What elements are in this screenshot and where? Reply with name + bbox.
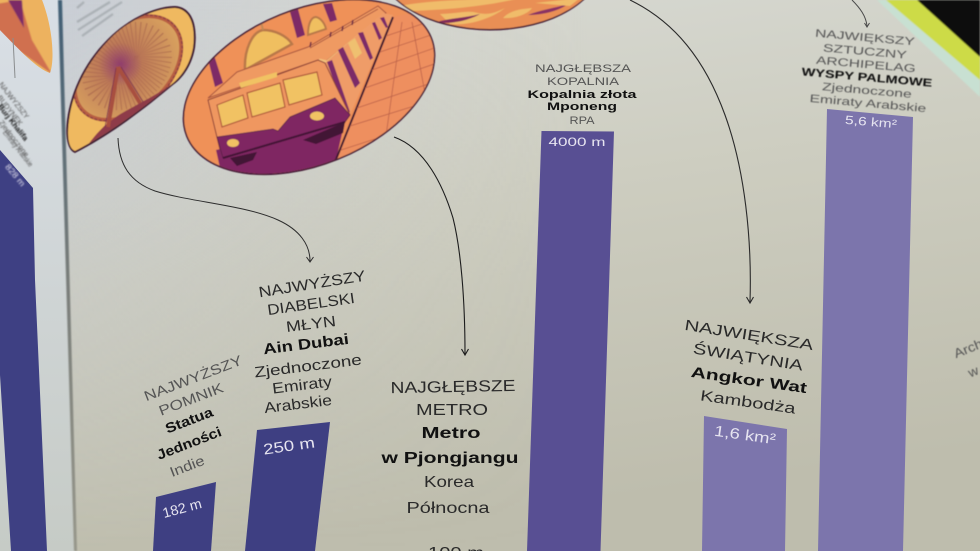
ferris ground xyxy=(89,86,170,144)
label: largest artificial archipelago: Zjednoczone xyxy=(822,81,912,101)
page corner: next pages and dark background xyxy=(877,0,980,97)
label: largest temple xyxy=(683,317,814,418)
label: deepest metro: METRO xyxy=(416,402,488,419)
train windows xyxy=(217,72,322,127)
label: largest temple: NAJWIĘKSZA xyxy=(683,317,814,354)
label: tallest statue: Jedności xyxy=(154,423,224,463)
book gutter xyxy=(58,0,77,551)
train underside and wheels xyxy=(223,122,345,158)
arrow: archipelago to label xyxy=(852,0,870,27)
label: largest temple: Angkor Wat xyxy=(690,364,808,397)
label: deepest metro: Metro xyxy=(422,425,481,442)
label: deepest mine xyxy=(528,63,638,127)
label: tallest statue: POMNIK xyxy=(156,379,226,419)
cropped label at right edge xyxy=(951,336,980,381)
wheel rim xyxy=(74,14,184,122)
label: tallest statue: NAJWYŻSZY xyxy=(141,351,245,404)
label: largest temple: Kambodża xyxy=(699,387,798,418)
bar: temple 1,6 km2: 1,6 km² xyxy=(713,423,777,448)
station arches xyxy=(245,30,292,70)
label: tallest ferris wheel xyxy=(253,267,367,417)
bar: statue 182 m: 182 m xyxy=(161,495,203,521)
bar: ferris wheel 250 m xyxy=(245,422,330,551)
label: tallest ferris wheel: MŁYN xyxy=(285,313,337,336)
label: largest artificial archipelago: ARCHIPELAG xyxy=(816,55,916,75)
label: tallest ferris wheel: Zjednoczone xyxy=(253,351,363,382)
ground under train xyxy=(216,124,342,174)
label: tallest ferris wheel: Ain Dubai xyxy=(262,331,350,358)
roof pantograph marks xyxy=(310,20,353,47)
label: tallest statue: Indie xyxy=(167,452,207,480)
label: deepest mine: KOPALNIA xyxy=(547,76,620,88)
train side xyxy=(325,13,393,115)
ferris legs xyxy=(108,67,140,127)
cropped label at right edge: w xyxy=(965,362,980,381)
platform xyxy=(337,14,435,159)
left facing page xyxy=(0,0,77,551)
label: deepest metro: NAJGŁĘBSZE xyxy=(390,378,516,397)
bar: ferris wheel 250 m: 250 m xyxy=(262,434,316,459)
bar: statue 182 m xyxy=(153,482,216,551)
label: tallest statue xyxy=(141,351,245,480)
label: largest artificial archipelago: Emiraty Arabskie xyxy=(809,93,927,115)
label: deepest metro: w Pjongjangu xyxy=(380,450,518,467)
label: tallest ferris wheel: DIABELSKI xyxy=(266,290,356,319)
label: deepest mine: NAJGŁĘBSZA xyxy=(535,63,632,75)
label: deepest mine: Mponeng xyxy=(547,101,617,113)
illustration: ferris wheel xyxy=(66,5,196,154)
label: largest artificial archipelago xyxy=(801,28,933,115)
train lower body xyxy=(217,98,350,158)
station pillars xyxy=(207,3,337,87)
left page caption: Emiraty Arabskie xyxy=(1,128,35,169)
train destination sign xyxy=(239,72,277,88)
train roof xyxy=(208,6,386,98)
label: tallest statue: Statua xyxy=(163,403,215,436)
bar: temple 1,6 km2 xyxy=(702,416,787,551)
faint text at top of main page xyxy=(77,2,122,36)
illustration: gold mine ellipse xyxy=(395,0,585,32)
label: tallest ferris wheel: Arabskie xyxy=(263,392,333,417)
train front xyxy=(208,60,350,158)
label: tallest ferris wheel: NAJWYŻSZY xyxy=(257,267,367,301)
bar: mine 4000 m xyxy=(527,131,614,551)
label: largest artificial archipelago: SZTUCZNY xyxy=(823,42,908,62)
label: largest artificial archipelago: NAJWIĘKSZY xyxy=(815,28,916,48)
label: deepest metro: Korea xyxy=(424,474,474,491)
bar: mine 4000 m: 4000 m xyxy=(548,135,606,149)
arrow: metro to label xyxy=(394,137,468,355)
bar: archipelago 5,6 km2: 5,6 km² xyxy=(844,113,898,131)
label: tallest ferris wheel: Emiraty xyxy=(271,373,333,398)
bar: left page tallest building: 828 m xyxy=(3,163,27,189)
label: largest temple: ŚWIĄTYNIA xyxy=(692,339,804,375)
arrow: ferris wheel to label xyxy=(118,138,314,262)
illustration: metro train xyxy=(182,0,436,176)
wheel spokes xyxy=(91,31,163,101)
arrow: temple to label xyxy=(630,0,754,303)
bar: left page tallest building xyxy=(0,150,47,551)
bar: archipelago 5,6 km2 xyxy=(818,109,913,551)
label: deepest metro xyxy=(380,378,518,551)
pointer line on left page xyxy=(13,38,15,78)
label: largest artificial archipelago: WYSPY PALMOWE xyxy=(801,66,933,90)
label: deepest mine: Kopalnia złota xyxy=(528,89,638,101)
illustration: left page ellipse xyxy=(0,0,52,73)
left page caption xyxy=(0,80,35,169)
label: deepest mine: RPA xyxy=(570,115,595,127)
label: deepest metro: Północna xyxy=(406,500,490,517)
train headlights xyxy=(227,139,239,147)
